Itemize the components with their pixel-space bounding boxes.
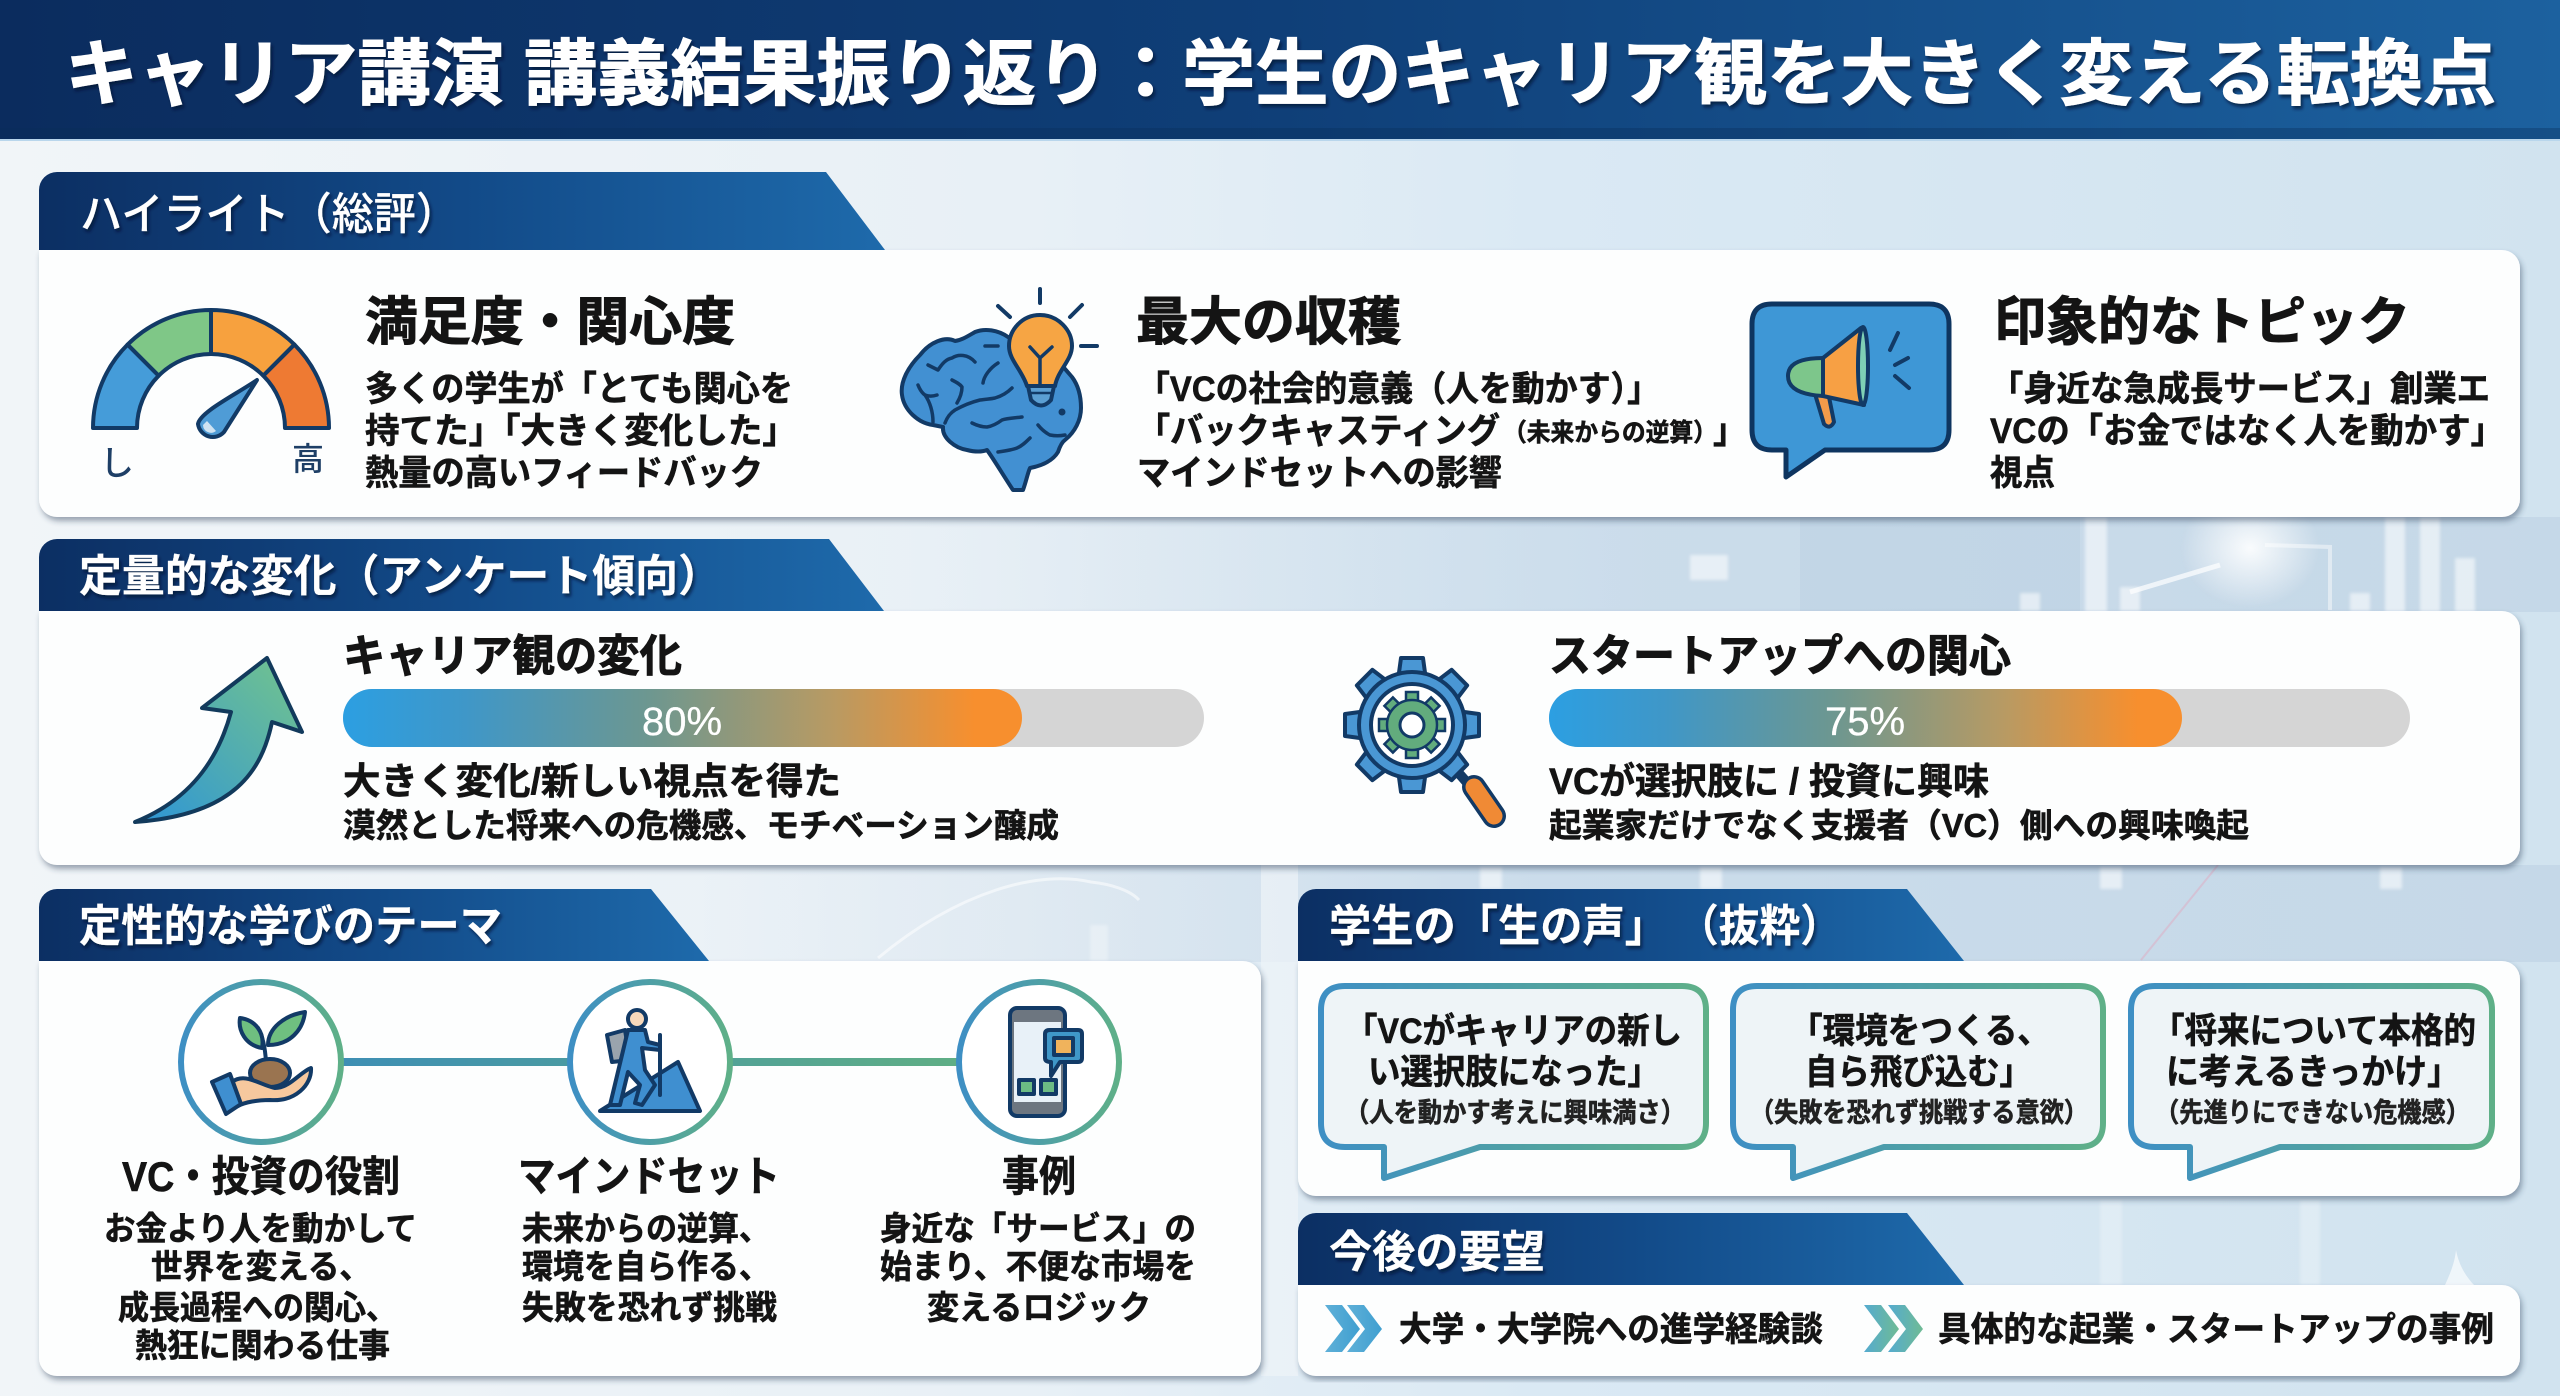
metric: career view 80%: 漠然とした将来への危機感、モチベーション醸成 <box>343 807 1059 844</box>
icon: climber on mountain <box>570 982 730 1142</box>
panel: voices body <box>1298 961 2520 1196</box>
section: qualitative themes <box>39 889 1261 1376</box>
icon: chevrons 2 <box>1864 1305 1923 1352</box>
section: future requests <box>1298 1213 2520 1376</box>
icon: satisfaction gauge: し <box>100 445 134 483</box>
theme 2: mindset: マインドセット <box>518 1153 780 1200</box>
panel: quantitative body <box>39 611 2520 865</box>
text block: memorable topics: 印象的なトピック <box>1994 294 2410 352</box>
speech bubble 3 <box>2131 986 2492 1178</box>
heading tab: qualitative: 定性的な学びのテーマ <box>79 902 502 951</box>
speech bubble 3: に考えるきっかけ」 <box>2166 1053 2460 1092</box>
text block: memorable topics: VCの「お金ではなく人を動かす」 <box>1990 412 2504 451</box>
icon: gear and magnifier <box>1345 658 1494 816</box>
progress bar 80% <box>343 689 1204 747</box>
progress bar 75%: 75% <box>1825 700 1905 744</box>
progress bar 80%: 80% <box>642 700 722 744</box>
heading tab: voices: 学生の「生の声」 <box>1329 902 1667 951</box>
text block: satisfaction: 満足度・関心度 <box>365 294 735 352</box>
text block: biggest takeaway: 「VCの社会的意義（人を動かす）」 <box>1137 370 1660 409</box>
metric: startup interest 75% <box>1549 632 2410 844</box>
icon: megaphone speech bubble <box>1752 304 1949 477</box>
section: quantitative change <box>39 539 2520 865</box>
icon: rising arrow <box>135 658 302 822</box>
heading tab: qualitative <box>39 889 709 961</box>
text block: satisfaction <box>365 294 797 493</box>
section: highlights <box>39 172 2520 517</box>
speech bubble 2: （失敗を恐れず挑戦する意欲） <box>1750 1098 2088 1128</box>
speech bubble 1 <box>1321 986 1706 1178</box>
theme 3: case studies: 変えるロジック <box>927 1289 1151 1326</box>
theme 3: case studies: 事例 <box>1002 1153 1076 1200</box>
speech bubble 1: い選択肢になった」 <box>1368 1053 1660 1092</box>
theme 3: case studies: 始まり、不便な市場を <box>880 1248 1196 1285</box>
section: student voices <box>1298 889 2520 1196</box>
text block: memorable topics: 「身近な急成長サービス」創業エ <box>1990 370 2490 409</box>
text block: biggest takeaway: （未来からの逆算） <box>1503 419 1717 447</box>
metric: career view 80%: 大きく変化/新しい視点を得た <box>343 761 841 802</box>
theme 2: mindset <box>518 1153 780 1326</box>
request 2: 具体的な起業・スタートアップの事例 <box>1938 1311 2494 1349</box>
text block: satisfaction: 熱量の高いフィードバック <box>365 454 763 493</box>
heading tab: highlights <box>39 172 885 250</box>
speech bubble 3: 「将来について本格的 <box>2152 1012 2476 1051</box>
theme 1: VC and investment: 世界を変える、 <box>151 1248 371 1285</box>
heading tab: quantitative: 定量的な変化（アンケート傾向） <box>79 552 721 601</box>
text block: biggest takeaway: マインドセットへの影響 <box>1137 454 1502 493</box>
progress bar 75% <box>1549 689 2410 747</box>
icon: satisfaction gauge <box>93 310 329 483</box>
speech bubble 2: 「環境をつくる、 <box>1790 1012 2050 1051</box>
heading tab: highlights: ハイライト（総評） <box>80 190 458 239</box>
metric: career view 80%: キャリア観の変化 <box>343 632 682 681</box>
icon: smartphone with service <box>959 982 1119 1142</box>
text block: biggest takeaway <box>1136 294 1747 493</box>
text block: satisfaction: 多くの学生が「とても関心を <box>365 370 793 409</box>
panel: highlights body <box>39 250 2520 517</box>
metric: startup interest 75%: スタートアップへの関心 <box>1549 632 2011 681</box>
connector line <box>343 1058 957 1066</box>
theme 2: mindset: 失敗を恐れず挑戦 <box>522 1289 777 1326</box>
metric: startup interest 75%: 起業家だけでなく支援者（VC）側への興味喚起 <box>1549 807 2249 844</box>
theme 3: case studies: 身近な「サービス」の <box>880 1210 1196 1247</box>
theme 1: VC and investment: お金より人を動かして <box>104 1210 417 1247</box>
title: キャリア講演 講義結果振り返り：学生のキャリア観を大きく変える転換点 <box>65 35 2496 115</box>
text block: memorable topics: 視点 <box>1990 454 2055 493</box>
text block: satisfaction: 持てた」「大きく変化した」 <box>365 412 797 451</box>
text block: memorable topics <box>1990 294 2504 493</box>
icon: brain with light bulb <box>902 289 1097 490</box>
metric: career view 80% <box>343 632 1204 844</box>
text block: biggest takeaway: 最大の収穫 <box>1136 294 1401 352</box>
panel: qualitative body <box>39 961 1261 1376</box>
heading tab: requests <box>1298 1213 1964 1285</box>
heading tab: voices <box>1298 889 1964 961</box>
theme 1: VC and investment <box>104 1153 417 1364</box>
heading tab: voices: （抜粋） <box>1678 902 1841 951</box>
theme 3: case studies <box>880 1153 1196 1326</box>
icon: chevrons 1 <box>1325 1305 1382 1352</box>
icon: satisfaction gauge: 高 <box>292 441 324 477</box>
speech bubble 2 <box>1733 986 2103 1178</box>
speech bubble 1: 「VCがキャリアの新し <box>1345 1012 1682 1051</box>
request 1: 大学・大学院への進学経験談 <box>1399 1311 1823 1349</box>
theme 1: VC and investment: VC・投資の役割 <box>122 1153 400 1200</box>
theme 1: VC and investment: 成長過程への関心、 <box>118 1289 397 1326</box>
text block: biggest takeaway: 」 <box>1713 412 1747 451</box>
theme 2: mindset: 未来からの逆算、 <box>522 1210 770 1247</box>
icon: seedling in hand <box>181 982 341 1142</box>
title banner <box>0 0 2560 141</box>
speech bubble 2: 自ら飛び込む」 <box>1805 1053 2032 1092</box>
speech bubble 3: （先進りにできない危機感） <box>2155 1098 2470 1128</box>
metric: startup interest 75%: VCが選択肢に / 投資に興味 <box>1549 761 1989 802</box>
heading tab: quantitative <box>39 539 884 611</box>
panel: requests body <box>1298 1285 2520 1376</box>
speech bubble 1: （人を動かす考えに興味満さ） <box>1345 1098 1685 1128</box>
theme 2: mindset: 環境を自ら作る、 <box>522 1248 770 1285</box>
heading tab: requests: 今後の要望 <box>1329 1228 1545 1277</box>
theme 1: VC and investment: 熱狂に関わる仕事 <box>135 1327 390 1364</box>
text block: biggest takeaway: 「バックキャスティング <box>1137 412 1500 451</box>
